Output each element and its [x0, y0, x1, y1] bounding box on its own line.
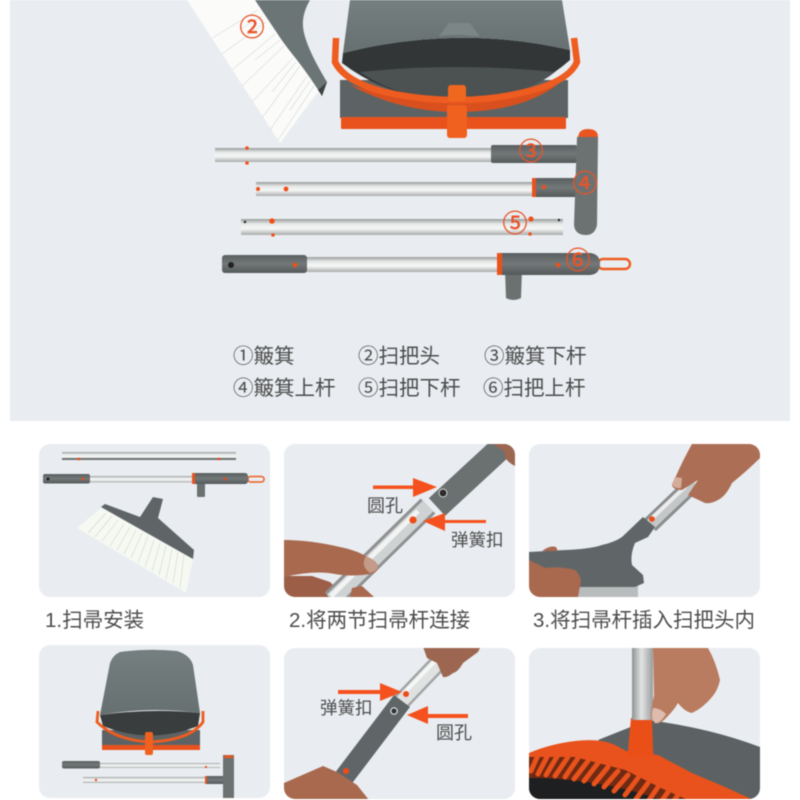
hand: thumb and palm: [284, 540, 378, 577]
pole: [650, 483, 694, 525]
parts legend: ⑥扫把上杆: [483, 377, 586, 400]
spring button: [403, 691, 409, 697]
thumb nail: [364, 556, 378, 573]
hand: lower skin: [350, 586, 374, 597]
hand: [651, 648, 720, 723]
label: spring button: 弹簧扣: [451, 530, 504, 550]
hand: upper right: [672, 444, 760, 503]
part 2: broom head: ②: [239, 14, 265, 42]
hand: right top: [493, 444, 515, 466]
part 5: broom lower pole: ⑤: [502, 210, 528, 238]
pole: lower broom pole: [62, 452, 236, 460]
grey dustpan body: [598, 720, 760, 800]
caption: step 1: 1.扫帚安装: [45, 609, 144, 632]
broom head: [77, 497, 194, 593]
part 2: broom head: [187, 0, 327, 143]
parts legend: ②扫把头: [358, 345, 440, 368]
label: round hole: 圆孔: [367, 496, 403, 516]
broom head held: [529, 517, 655, 587]
panel: step 3 insert pole into head: [529, 444, 760, 597]
part 4: dustpan upper pole: ④: [572, 170, 598, 198]
panel: step 1 broom installation: [39, 444, 270, 597]
panel: step 2 connect two poles: [284, 434, 516, 600]
black opening: [529, 778, 660, 800]
spring button: [409, 516, 417, 524]
parts legend: ①簸箕: [233, 345, 294, 368]
arrow: spring button: [338, 683, 402, 701]
thumb on head: [542, 546, 558, 551]
hand: lower left: [529, 560, 581, 597]
part 5: broom lower pole: [241, 210, 563, 238]
thumb nail: [672, 477, 682, 488]
panel: step 4 dustpan installation: [39, 645, 270, 798]
label: round hole: 圆孔: [436, 723, 472, 743]
arrow: spring button: [423, 513, 486, 531]
panel: parts overview: [10, 0, 790, 421]
aluminium pole: [400, 658, 443, 703]
hole: [439, 489, 447, 497]
parts legend: ③簸箕下杆: [484, 345, 586, 368]
label: spring button: 弹簧扣: [320, 698, 372, 718]
part 6: broom upper pole: ⑥: [565, 247, 591, 275]
pole: upper broom pole: [43, 473, 264, 497]
part 3: dustpan lower pole: [215, 138, 577, 166]
caption: step 3: 3.将扫帚杆插入扫把头内: [533, 609, 755, 632]
hand: fingers behind pole: [283, 575, 333, 598]
hole: [391, 708, 397, 714]
lower button: [343, 768, 349, 774]
part 4: dustpan upper pole: [256, 129, 598, 235]
part 6: broom upper pole: [222, 247, 630, 300]
grey sleeve: [437, 434, 516, 507]
parts legend: ④簸箕上杆: [233, 377, 336, 400]
parts legend: [233, 345, 586, 400]
poles: [62, 755, 234, 798]
parts legend: ⑤扫把下杆: [358, 377, 460, 400]
aluminium pole: [632, 648, 653, 720]
thumb nail: [652, 708, 666, 723]
panel: step 6 insert pole into dustpan: [529, 648, 760, 800]
part 1: dustpan: [335, 0, 577, 138]
grey sleeve: [342, 701, 402, 780]
hand: top: [423, 647, 480, 678]
dustpan: [97, 650, 203, 755]
part 3: dustpan lower pole: ③: [518, 138, 544, 166]
hand: bottom: [284, 766, 369, 800]
spring button: [649, 516, 655, 522]
orange rake: [529, 740, 760, 800]
aluminium pole: [331, 506, 428, 600]
bristles: [578, 586, 638, 598]
arrow: round hole: [407, 706, 468, 724]
panel: step 5 lock dustpan pole: [284, 644, 515, 800]
dark gaps and opening: [528, 756, 686, 800]
caption: step 2: 2.将两节扫帚杆连接: [289, 609, 470, 632]
orange socket: [625, 718, 654, 757]
arrow: round hole: [373, 478, 437, 497]
